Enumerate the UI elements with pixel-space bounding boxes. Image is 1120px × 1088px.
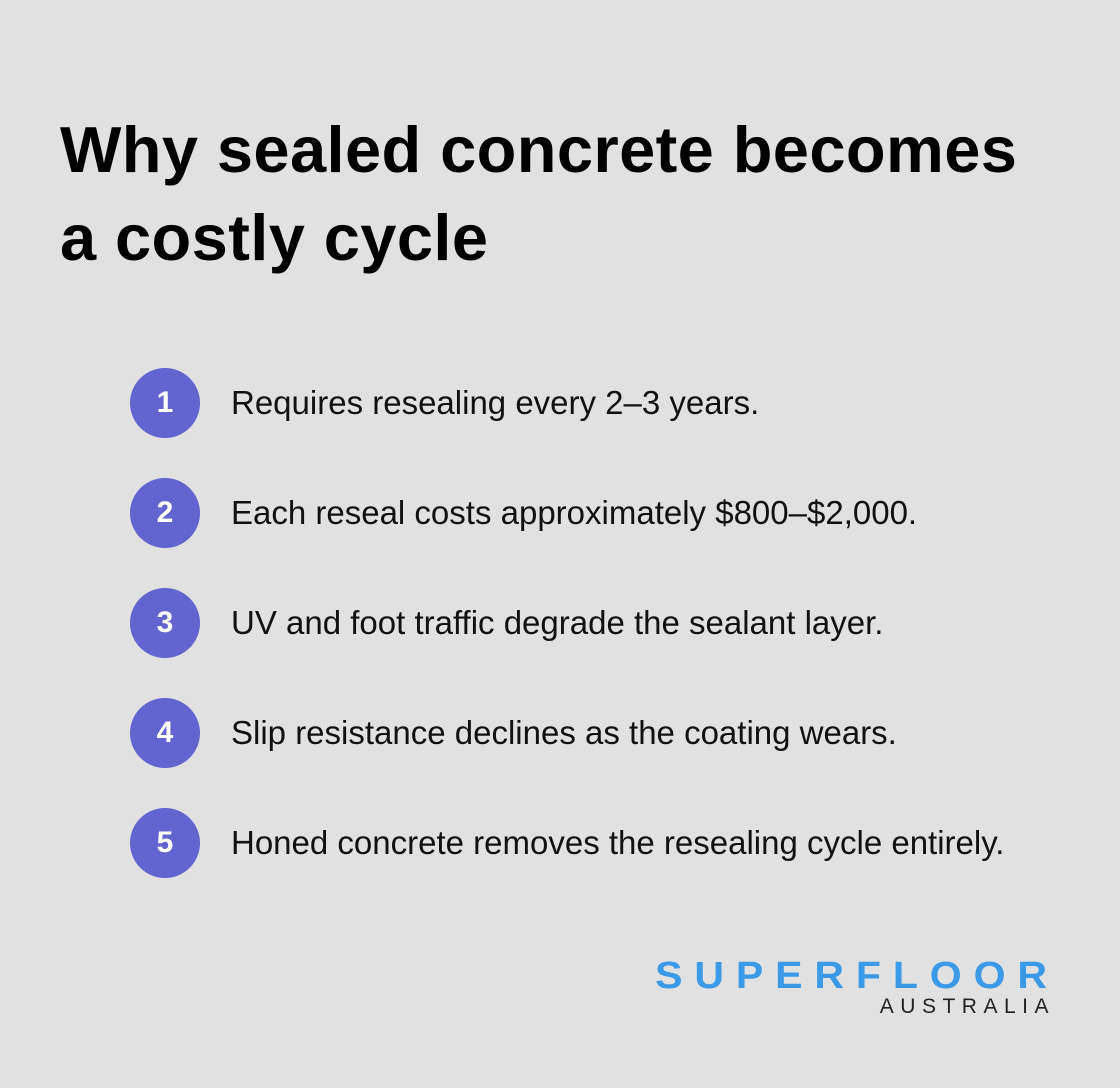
item 2: Each reseal costs approximately $800–$2,000. (231, 494, 917, 531)
title: a costly cycle (60, 201, 488, 274)
item 1: Requires resealing every 2–3 years. (231, 384, 759, 421)
item 2: 2 (157, 496, 173, 529)
logo (655, 955, 1059, 1018)
item 5: 5 (157, 826, 173, 859)
item 4: 4 (157, 716, 173, 749)
title (60, 113, 1017, 274)
item 5 (130, 808, 1004, 878)
title: Why sealed concrete becomes (60, 113, 1017, 186)
item 1: 1 (157, 386, 173, 419)
item 3 (130, 588, 883, 658)
logo: AUSTRALIA (880, 995, 1055, 1018)
logo: SUPERFLOOR (655, 955, 1059, 997)
item 3: 3 (157, 606, 173, 639)
item 2 (130, 478, 917, 548)
item 1 (130, 368, 759, 438)
item 4 (130, 698, 897, 768)
item 3: UV and foot traffic degrade the sealant layer. (231, 604, 883, 641)
item 4: Slip resistance declines as the coating wears. (231, 714, 897, 751)
item 5: Honed concrete removes the resealing cycle entirely. (231, 824, 1004, 861)
